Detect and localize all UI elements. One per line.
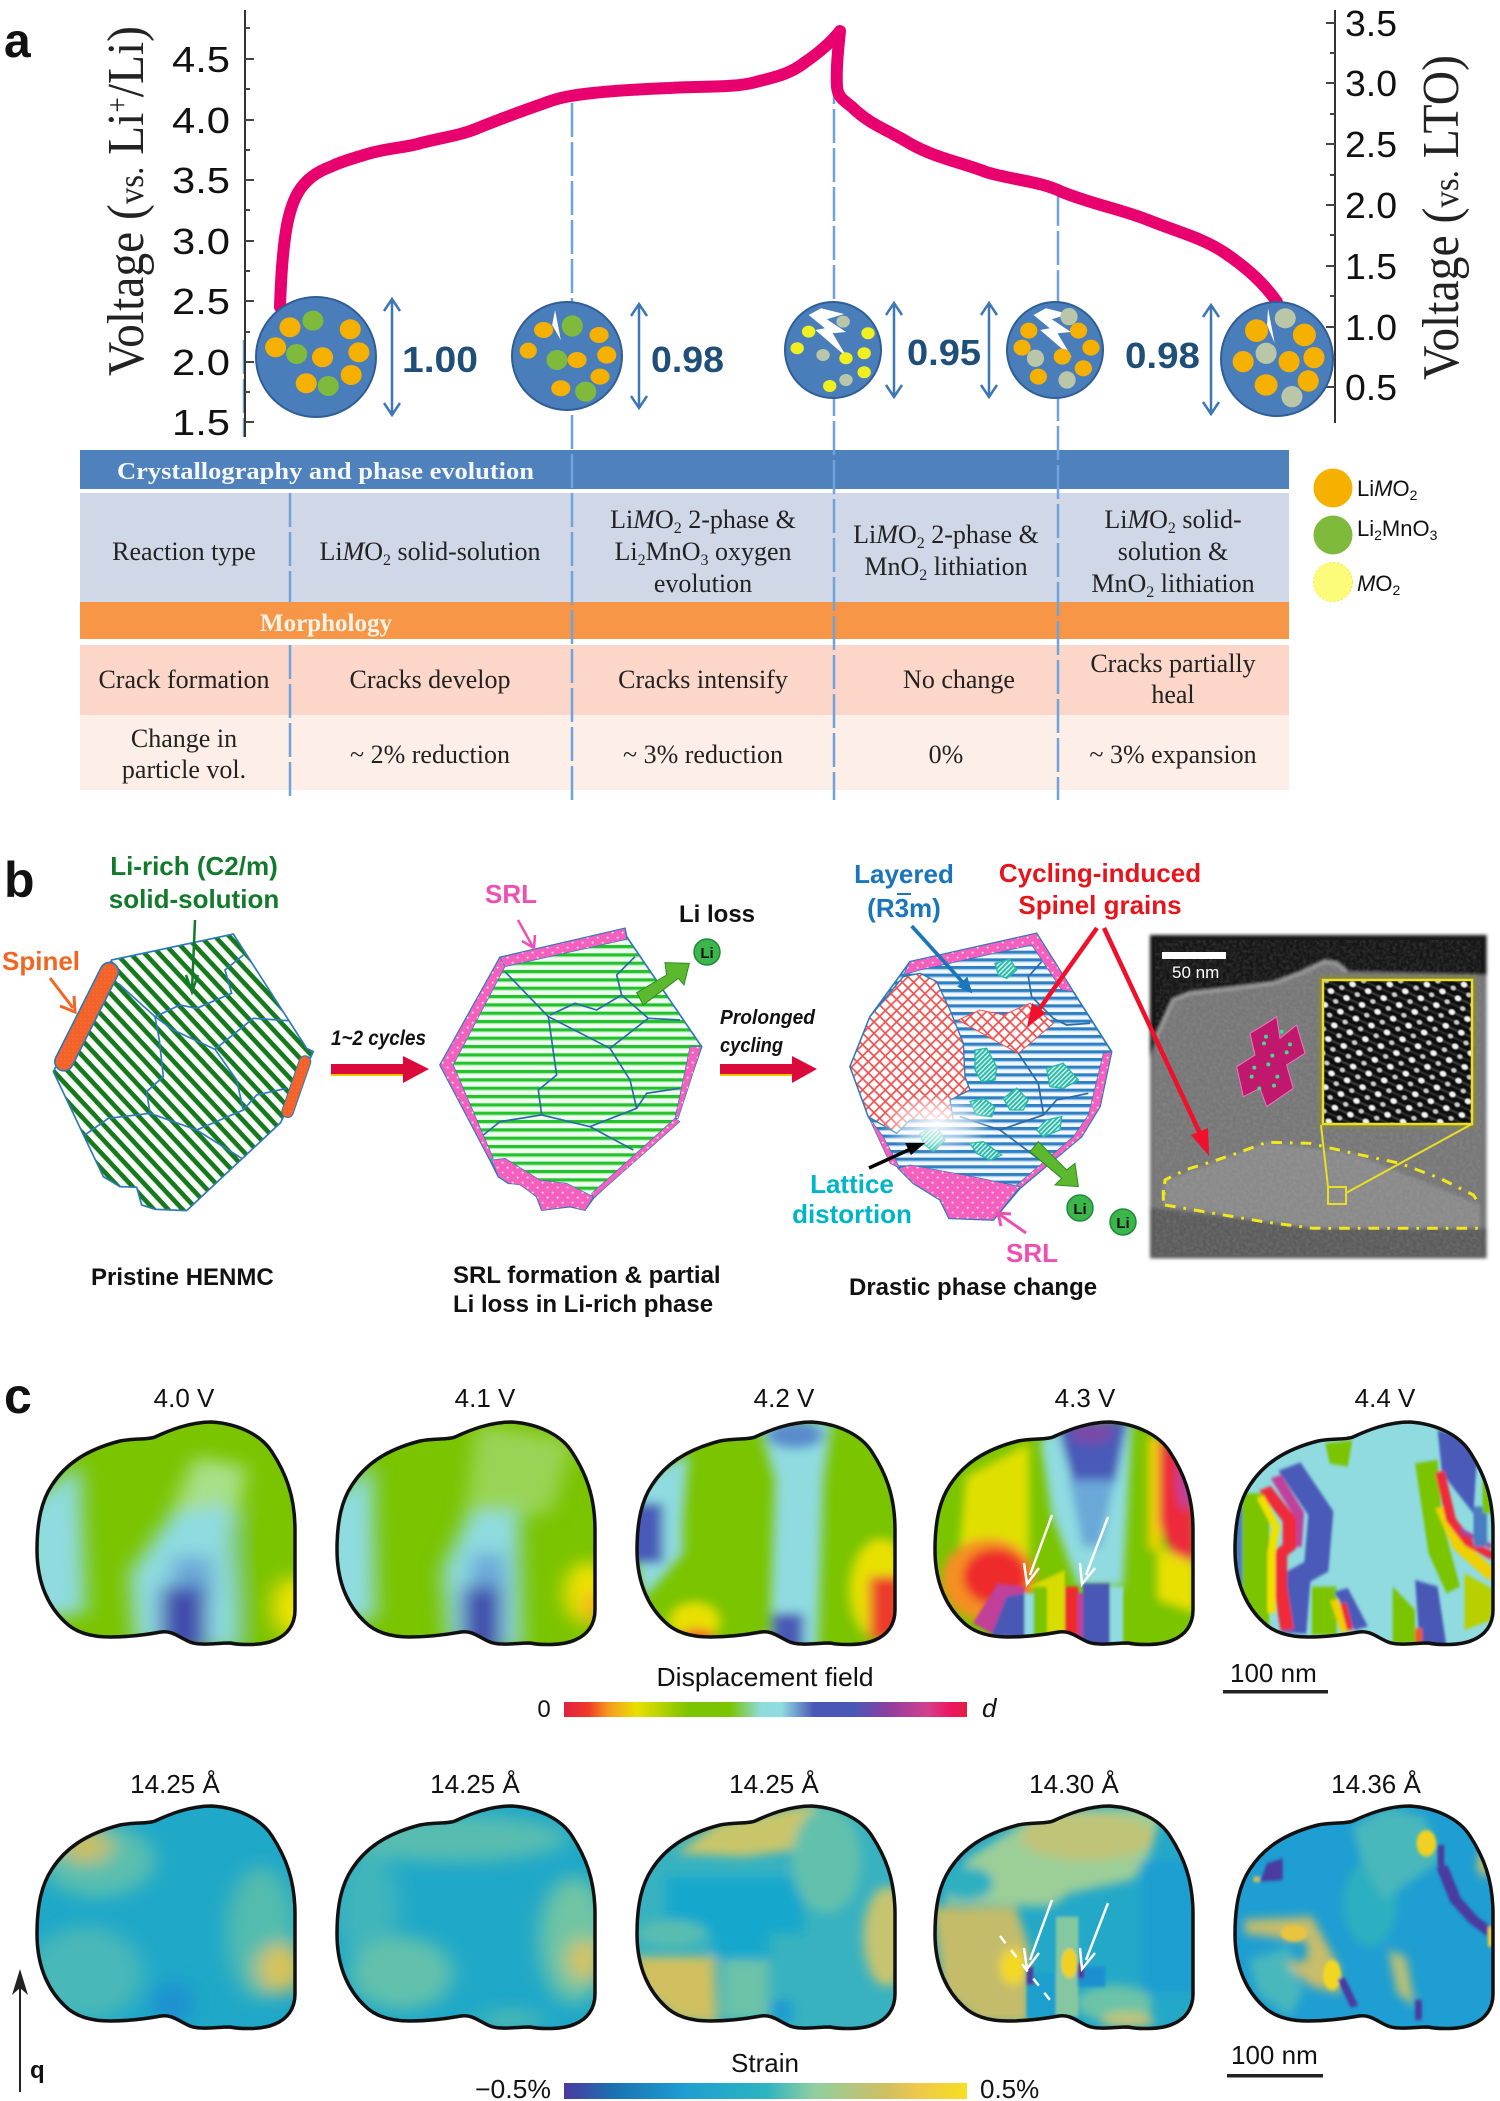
- label: spinel: [2, 946, 80, 1012]
- q direction arrow: q: [30, 2057, 45, 2084]
- legend: particle phases: MnO: [1382, 516, 1430, 541]
- captions for panel b: SRL formation & partial: [453, 1262, 721, 1289]
- legend: particle phases: LiMO: [1357, 476, 1410, 501]
- left axis title: /Li): [98, 26, 155, 97]
- displacement map: 4.1 V: [300, 1410, 612, 1660]
- section header: morphology: [80, 602, 1289, 639]
- arrow: prolonged cycling: Prolonged: [720, 1007, 816, 1029]
- heading labels: lattice spacing: 14.25 Å: [729, 1769, 819, 1799]
- left axis title: +: [101, 97, 134, 113]
- particle 3: [785, 302, 881, 398]
- colour bar: displacement field: 0: [537, 1696, 551, 1723]
- heading labels: lattice spacing: 14.25 Å: [130, 1769, 220, 1799]
- row: reaction type: solution &: [1118, 537, 1228, 566]
- label: lattice distortion: Lattice: [810, 1169, 894, 1199]
- row: change in particle volume: [80, 715, 1289, 790]
- row: crack formation: Crack formation: [98, 665, 270, 694]
- arrow: prolonged cycling: cycling: [720, 1035, 783, 1057]
- Li loss with ion and arrow: Li: [700, 945, 714, 962]
- legend: particle phases: [1314, 468, 1438, 602]
- captions for panel b: Drastic phase change: [849, 1274, 1097, 1301]
- row: change in particle volume: ~ 2% reduction: [350, 740, 510, 769]
- panel label: b: b: [4, 852, 35, 908]
- label: SRL bottom: [998, 1213, 1058, 1268]
- row: reaction type: 2-phase &: [925, 520, 1039, 549]
- heading labels: lattice spacing: 14.30 Å: [1029, 1769, 1119, 1799]
- label: Li-rich solid-solution: [109, 851, 279, 992]
- TEM micrograph: [1150, 935, 1487, 1258]
- strain map: 14.25 A second: [335, 1804, 597, 2030]
- row: reaction type: 2: [383, 552, 391, 569]
- displacement map: 4.0 V: [35, 1420, 297, 1646]
- label: layered: [854, 859, 972, 993]
- label: lattice distortion: distortion: [792, 1199, 912, 1229]
- displacement map: 4.2 V: [635, 1420, 897, 1646]
- label: layered: (R3m): [867, 893, 941, 923]
- right voltage axis: 0.5: [1345, 367, 1397, 408]
- double arrows and scale ratios: 0.98: [1125, 335, 1200, 376]
- left voltage axis: 4.5: [172, 39, 230, 80]
- label: cycling-induced spinel grains: [999, 858, 1209, 1156]
- row: change in particle volume: ~ 3% reduction: [623, 740, 783, 769]
- strain map: 14.25 A third: [635, 1804, 897, 2030]
- row: reaction type: [80, 493, 1289, 602]
- scale bar: 100 nm top: 100 nm: [1230, 1658, 1317, 1688]
- right voltage axis: 3.0: [1345, 63, 1397, 104]
- right voltage axis: 1.5: [1345, 246, 1397, 287]
- panel label: a: a: [4, 15, 31, 68]
- inset: atomic lattice: [1318, 975, 1477, 1204]
- row: reaction type: Reaction type: [112, 537, 256, 566]
- Li ions leaving: Li: [1116, 1215, 1130, 1232]
- row: reaction type: LiMO: [610, 505, 674, 534]
- label: SRL top: [485, 879, 537, 948]
- row: change in particle volume: Change in: [131, 724, 237, 753]
- captions for panel b: [91, 1262, 1097, 1318]
- row: crack formation: heal: [1151, 680, 1195, 709]
- strain map: 14.30 A: [933, 1804, 1195, 2030]
- label: lattice distortion: [792, 1143, 925, 1229]
- captions for panel b: Li loss in Li-rich phase: [453, 1291, 713, 1318]
- panel label: c: c: [4, 1368, 32, 1424]
- scale bar 50 nm: [1162, 952, 1226, 982]
- right voltage axis: [1326, 3, 1397, 423]
- strain map: 14.25 A first: [35, 1804, 297, 2030]
- left voltage axis: 3.5: [172, 160, 230, 201]
- double arrows and scale ratios: 1.00: [402, 339, 478, 380]
- particle schematics: [256, 297, 1333, 417]
- row: reaction type: Li: [614, 537, 638, 566]
- section header: crystallography: [80, 450, 1289, 489]
- right voltage axis: 3.5: [1345, 3, 1397, 44]
- left voltage axis: 2.0: [172, 342, 230, 383]
- heading labels: voltage: 4.3 V: [1055, 1383, 1116, 1413]
- left voltage axis: 1.5: [172, 402, 230, 443]
- row: reaction type: MnO: [1091, 569, 1146, 598]
- row: reaction type: evolution: [654, 569, 752, 598]
- arrow: 1~2 cycles: [331, 1027, 429, 1083]
- row: reaction type: LiMO: [1104, 505, 1168, 534]
- colour bar: displacement field: d: [982, 1693, 998, 1723]
- heading labels: voltage: 4.0 V: [154, 1383, 215, 1413]
- captions for panel b: Pristine HENMC: [91, 1264, 274, 1291]
- row: reaction type: oxygen: [708, 537, 792, 566]
- legend: particle phases: 2: [1392, 582, 1400, 598]
- colour bar: strain: Strain: [731, 2048, 799, 2078]
- row: reaction type: LiMO: [853, 520, 917, 549]
- heading labels: voltage: [154, 1383, 1416, 1413]
- row: reaction type: solid-solution: [391, 537, 541, 566]
- legend: particle phases: 2: [1374, 527, 1382, 543]
- row: reaction type: 3: [700, 552, 708, 569]
- left voltage axis: [172, 10, 254, 443]
- row: reaction type: 2: [1168, 520, 1176, 537]
- row: change in particle volume: particle vol.: [122, 755, 246, 784]
- section header: crystallography: Crystallography and phase evolution: [117, 459, 534, 485]
- left axis title: Voltage (vs. Li: [98, 107, 155, 376]
- particle 4: [1007, 302, 1103, 398]
- label: layered: Layered: [854, 859, 954, 889]
- row: reaction type: lithiation: [927, 552, 1028, 581]
- row: reaction type: 2: [1146, 584, 1154, 601]
- right voltage axis: 2.5: [1345, 124, 1397, 165]
- scale bar 50 nm: 50 nm: [1172, 963, 1219, 982]
- white arrows: [1024, 1515, 1108, 1584]
- row: crack formation: No change: [903, 665, 1015, 694]
- row: reaction type: 2: [919, 567, 927, 584]
- particle 2: [512, 302, 622, 410]
- row: change in particle volume: 0%: [929, 740, 963, 769]
- particle: drastic phase change: [850, 933, 1112, 1220]
- right voltage axis: 1.0: [1345, 307, 1397, 348]
- colour bar: displacement field: Displacement field: [656, 1662, 874, 1692]
- right axis title: Voltage (vs. LTO): [1413, 55, 1470, 380]
- strain map: 14.36 A: [1233, 1804, 1495, 2030]
- row: reaction type: 2-phase &: [682, 505, 796, 534]
- table: phase evolution and morphology: [80, 450, 1289, 790]
- label: Li-rich solid-solution: solid-solution: [109, 884, 279, 914]
- voltage curve: [280, 31, 1277, 307]
- left voltage axis: 3.0: [172, 221, 230, 262]
- label: spinel: Spinel: [2, 946, 80, 976]
- heading labels: lattice spacing: [130, 1769, 1421, 1799]
- particle 1: [256, 297, 376, 417]
- displacement map: 4.3 V: [933, 1420, 1195, 1646]
- heading labels: voltage: 4.4 V: [1355, 1383, 1416, 1413]
- row: reaction type: 2: [917, 535, 925, 552]
- row: reaction type: 2: [674, 520, 682, 537]
- row: crack formation: Cracks partially: [1090, 649, 1256, 678]
- particle 5: [1221, 302, 1333, 416]
- heading labels: voltage: 4.1 V: [455, 1383, 516, 1413]
- row: reaction type: 2: [638, 552, 646, 569]
- left voltage axis: 4.0: [172, 100, 230, 141]
- colour bar: strain: [475, 2048, 1039, 2101]
- label: cycling-induced spinel grains: Spinel grains: [1018, 890, 1182, 920]
- Li loss with ion and arrow: [637, 901, 755, 1005]
- row: crack formation: Cracks develop: [349, 665, 511, 694]
- arrow: prolonged cycling: [720, 1007, 817, 1083]
- Li ions leaving: Li: [1073, 1201, 1087, 1218]
- Li loss with ion and arrow: Li loss: [679, 901, 755, 928]
- legend: particle phases: 3: [1430, 527, 1438, 543]
- arrow: 1~2 cycles: 1~2 cycles: [331, 1027, 426, 1050]
- white arrows and dashed line: [1000, 1900, 1108, 2000]
- label: Li-rich solid-solution: Li-rich (C2/m): [110, 851, 278, 881]
- row: reaction type: lithiation: [1154, 569, 1255, 598]
- spinel crystal overlay: [1237, 1017, 1305, 1107]
- heading labels: lattice spacing: 14.36 Å: [1331, 1769, 1421, 1799]
- double arrows and scale ratios: 0.95: [907, 332, 981, 373]
- row: reaction type: MnO: [864, 552, 919, 581]
- scale bar: 100 nm bottom: 100 nm: [1231, 2040, 1318, 2070]
- section header: morphology: Morphology: [260, 610, 392, 637]
- label: cycling-induced spinel grains: Cycling-induced: [999, 858, 1201, 888]
- row: reaction type: LiMO: [319, 537, 383, 566]
- q direction arrow: [12, 1969, 45, 2092]
- right voltage axis: 2.0: [1345, 185, 1397, 226]
- displacement map: 4.4 V: [1233, 1420, 1495, 1646]
- label: SRL top: SRL: [485, 879, 537, 909]
- row: change in particle volume: ~ 3% expansion: [1089, 740, 1257, 769]
- row: crack formation: [80, 645, 1289, 715]
- Li ions leaving: [1030, 1142, 1136, 1235]
- row: reaction type: MnO: [646, 537, 700, 566]
- particle: pristine HENMC: [53, 934, 313, 1211]
- legend: particle phases: 2: [1410, 487, 1418, 503]
- double arrows and scale ratios: 0.98: [651, 339, 724, 380]
- dashed grain outline: [1163, 1142, 1480, 1228]
- colour bar: displacement field: [537, 1662, 998, 1723]
- heading labels: voltage: 4.2 V: [754, 1383, 815, 1413]
- particle: SRL formation: [440, 928, 702, 1211]
- scale bar: 100 nm top: [1223, 1658, 1328, 1694]
- legend: particle phases: MO: [1357, 571, 1392, 596]
- double arrows and scale ratios: [384, 299, 1219, 415]
- heading labels: lattice spacing: 14.25 Å: [430, 1769, 520, 1799]
- row: crack formation: Cracks intensify: [618, 665, 788, 694]
- left voltage axis: 2.5: [172, 281, 230, 322]
- label: SRL bottom: SRL: [1006, 1238, 1058, 1268]
- row: reaction type: solid-: [1176, 505, 1242, 534]
- legend: particle phases: Li: [1357, 516, 1374, 541]
